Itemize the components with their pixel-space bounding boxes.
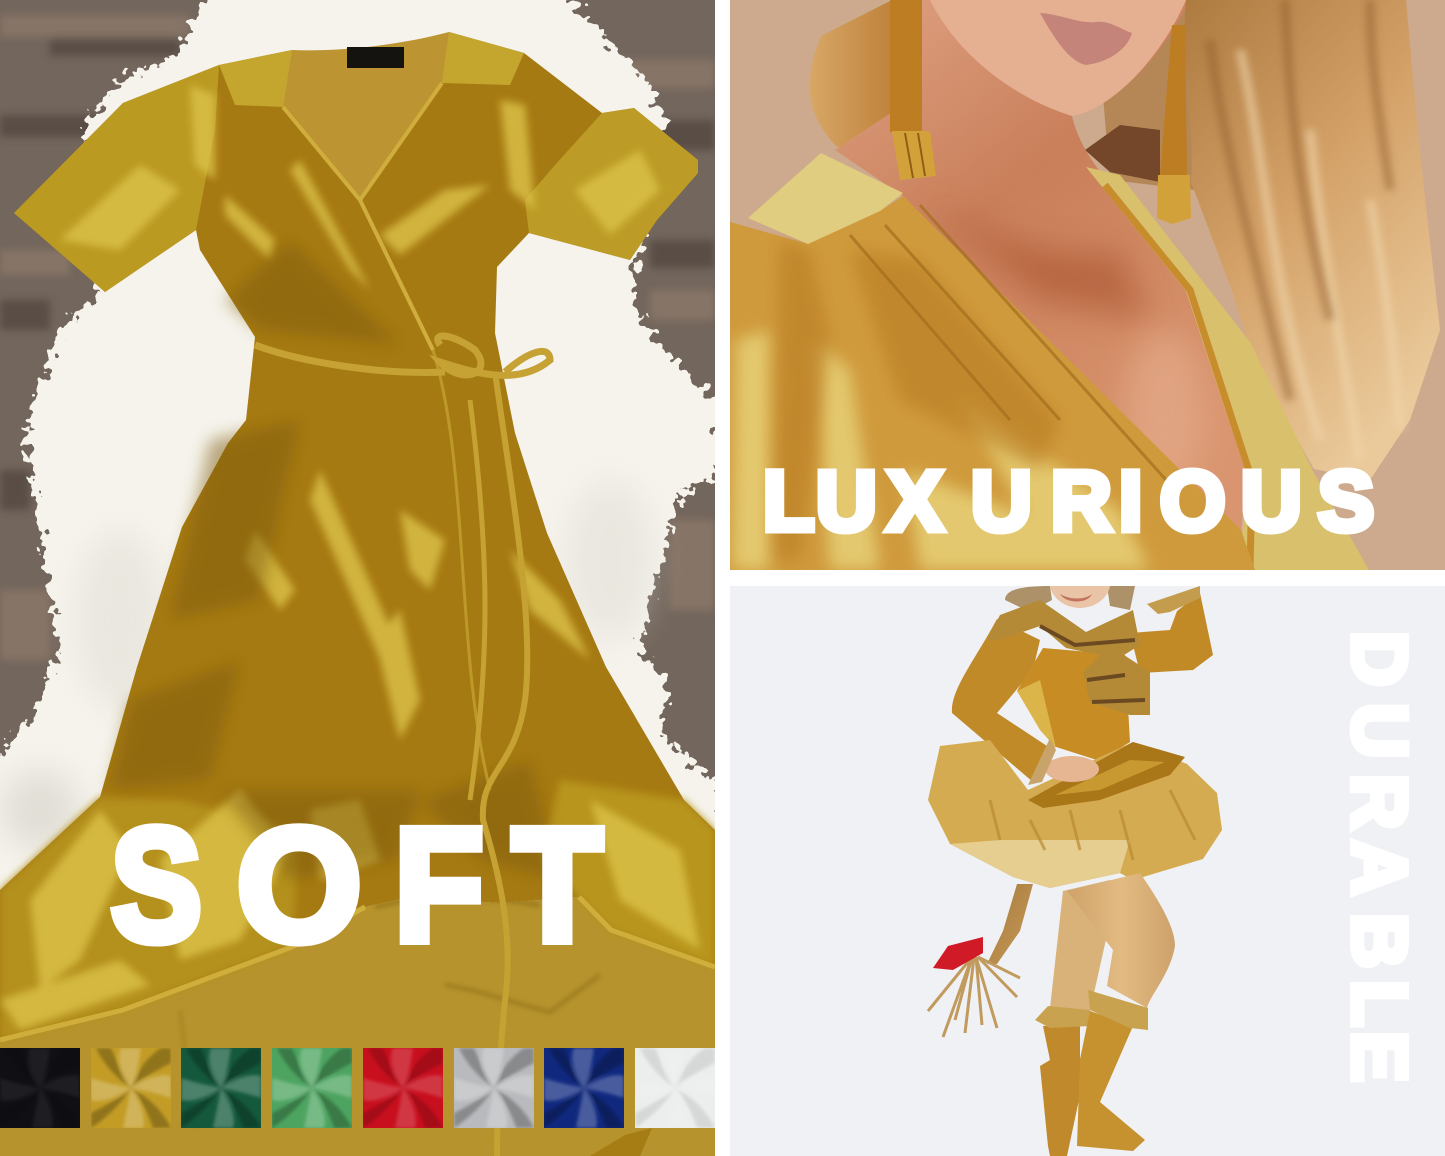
lips (1040, 13, 1132, 65)
dress (0, 32, 715, 1156)
neck label (347, 47, 404, 68)
tutu sheer underlayer (950, 840, 1130, 888)
dress right panel (1086, 167, 1369, 570)
hair dark strands (1210, 0, 1390, 400)
left sleeve brighter (14, 65, 219, 292)
tail tuft (928, 957, 1020, 1037)
smile (1060, 594, 1092, 602)
standing leg (1050, 880, 1110, 1011)
bottom right velvet scrap (590, 1128, 652, 1156)
back boot cuff (1035, 1006, 1090, 1028)
front boot (1077, 1011, 1145, 1151)
basque (1028, 742, 1185, 808)
velvet highlights (0, 85, 700, 1030)
panel: luxurious (730, 0, 1445, 570)
ruffle trim (1040, 626, 1145, 702)
heading: durable: DURABLE (1336, 631, 1422, 1082)
collar edge (283, 83, 442, 350)
swatch: white (635, 1048, 715, 1128)
wood floor background (0, 0, 715, 812)
chin and jaw highlight (930, 0, 1186, 116)
collar (748, 153, 903, 244)
velvet shadows (110, 240, 560, 880)
lion costume figure (928, 586, 1222, 1156)
fur shading (0, 480, 655, 850)
heading: soft: S (111, 797, 202, 974)
lining shade folds (180, 900, 600, 1048)
face neck and chest (835, 0, 1246, 530)
pleats (850, 205, 1175, 490)
earring left (890, 0, 936, 180)
hand (1045, 756, 1099, 782)
raised leg (1067, 873, 1175, 1008)
lower skirt tone (0, 797, 300, 1040)
right sleeve brighter (525, 108, 698, 260)
tutu folds (990, 790, 1195, 860)
tail (987, 884, 1033, 964)
right arm (1130, 593, 1213, 673)
hair light strands (1240, 50, 1400, 460)
dress right inner band (1105, 185, 1252, 570)
hanging tie ends (483, 372, 527, 1156)
neck and collarbone shadow (915, 190, 1150, 320)
wrap seam (433, 350, 490, 790)
left cuff (1028, 738, 1056, 785)
swatch: silver (454, 1048, 534, 1128)
swatch: dark green (181, 1048, 261, 1128)
hair right (1185, 0, 1440, 480)
studio background (730, 0, 1445, 570)
swatch: light green (272, 1048, 352, 1128)
dress body (0, 32, 715, 1040)
panel: soft (0, 0, 720, 1156)
left arm (952, 619, 1053, 782)
shoulder yoke (219, 32, 524, 107)
hair behind, left (810, 1, 890, 148)
white fur rug (0, 0, 720, 950)
heading: soft: F (394, 797, 483, 975)
waist tie (255, 336, 550, 375)
basque highlight (1055, 760, 1165, 795)
front boot cuff (1088, 990, 1148, 1030)
swatch: gold (91, 1048, 171, 1128)
right cuff (1147, 586, 1200, 614)
neckline lining (283, 32, 449, 200)
dark hair behind neck (1085, 125, 1160, 182)
wood and fur at bottom right corner (650, 1128, 715, 1156)
face (1050, 586, 1110, 608)
torso (1017, 648, 1130, 761)
swatch: black (0, 1048, 80, 1128)
hair behind chin (1100, 0, 1195, 190)
torso side highlight (1017, 680, 1056, 748)
chest highlight (1125, 330, 1205, 490)
heading: luxurious: LUXURIOUS (763, 454, 1374, 548)
tutu (928, 740, 1222, 888)
panel: durable (730, 586, 1445, 1156)
back boot (1040, 1026, 1080, 1156)
velvet highlights (732, 330, 1150, 570)
hair curls (1005, 586, 1135, 612)
lining under the dress (0, 897, 715, 1156)
heading: soft: T (513, 795, 602, 974)
heading: soft (110, 823, 606, 947)
light background (730, 586, 1445, 1156)
heading: soft: O (237, 795, 361, 974)
ruffled collar (987, 600, 1150, 715)
red bow (933, 937, 983, 970)
earring right (1157, 25, 1191, 224)
swatch: royal blue (544, 1048, 624, 1128)
swatches (0, 1048, 715, 1128)
dress left panel (730, 196, 1255, 570)
hem edge (0, 897, 715, 1040)
lapel shadows (775, 240, 1060, 560)
swatch: red (363, 1048, 443, 1128)
